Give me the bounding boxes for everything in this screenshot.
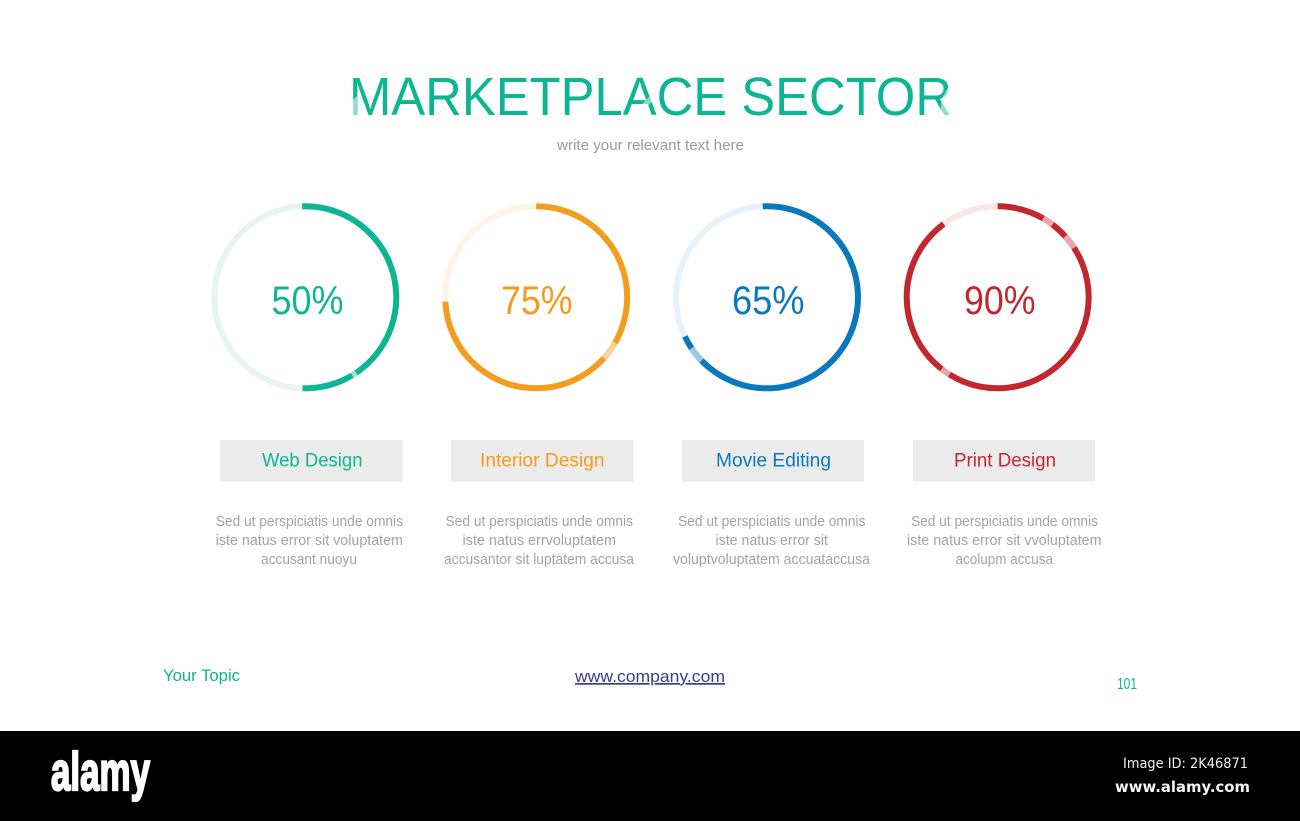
panel: interior design <box>412 173 661 568</box>
text block: movie editing: voluptvoluptatem accuataccusa <box>673 552 871 568</box>
donut chart: 50%: 50% <box>272 279 344 323</box>
text block: print design: acolupm accusa <box>956 552 1054 568</box>
text block: movie editing <box>673 514 871 568</box>
watermark url: www.alamy.com <box>1115 778 1250 796</box>
label: web design: Web Design <box>262 450 362 472</box>
panel: movie editing <box>638 169 896 568</box>
text block: movie editing: iste natus error sit <box>716 533 828 549</box>
label: interior design: Interior Design <box>480 450 604 472</box>
text block: interior design: Sed ut perspiciatis unde omnis <box>446 514 633 530</box>
title: MARKETPLACE SECTOR <box>349 67 952 127</box>
panel: web design <box>179 171 432 568</box>
label: movie editing <box>682 440 864 482</box>
image id: Image ID: 2K46871 <box>1123 756 1248 772</box>
text block: interior design: accusantor sit luptatem accusa <box>444 552 635 568</box>
label: movie editing: Movie Editing <box>716 450 831 472</box>
label: print design: Print Design <box>954 450 1056 472</box>
text block: web design: iste natus error sit voluptatem <box>216 533 403 549</box>
text block: interior design: iste natus errvoluptatem <box>462 533 616 549</box>
donut chart: 65%: 65% <box>732 279 804 323</box>
panel: print design <box>869 169 1126 568</box>
label: print design <box>913 440 1095 482</box>
text block: print design: iste natus error sit vvoluptatem <box>907 533 1102 549</box>
donut chart: 75%: 75% <box>501 279 572 323</box>
label: web design <box>220 440 403 482</box>
footer: topic: Your Topic <box>163 666 240 685</box>
text block: web design: Sed ut perspiciatis unde omnis <box>216 514 403 530</box>
donut chart: 65% <box>638 169 896 426</box>
donut chart: 90% <box>869 169 1126 426</box>
text block: print design: Sed ut perspiciatis unde omnis <box>911 514 1098 530</box>
text block: interior design <box>444 514 635 568</box>
text block: web design <box>216 514 403 568</box>
footer: website link: www.company.com <box>574 667 725 686</box>
text block: movie editing: Sed ut perspiciatis unde omnis <box>678 514 866 530</box>
donut chart: 75% <box>412 173 661 422</box>
footer: page number: 101 <box>1117 676 1137 693</box>
label: interior design <box>451 440 634 482</box>
watermark band <box>0 731 1300 821</box>
donut chart: 90%: 90% <box>964 279 1036 323</box>
subtitle: write your relevant text here <box>556 137 744 154</box>
text block: print design <box>907 514 1102 568</box>
donut chart: 50% <box>179 171 432 424</box>
watermark logo: alamy <box>51 742 150 802</box>
text block: web design: accusant nuoyu <box>261 552 357 568</box>
